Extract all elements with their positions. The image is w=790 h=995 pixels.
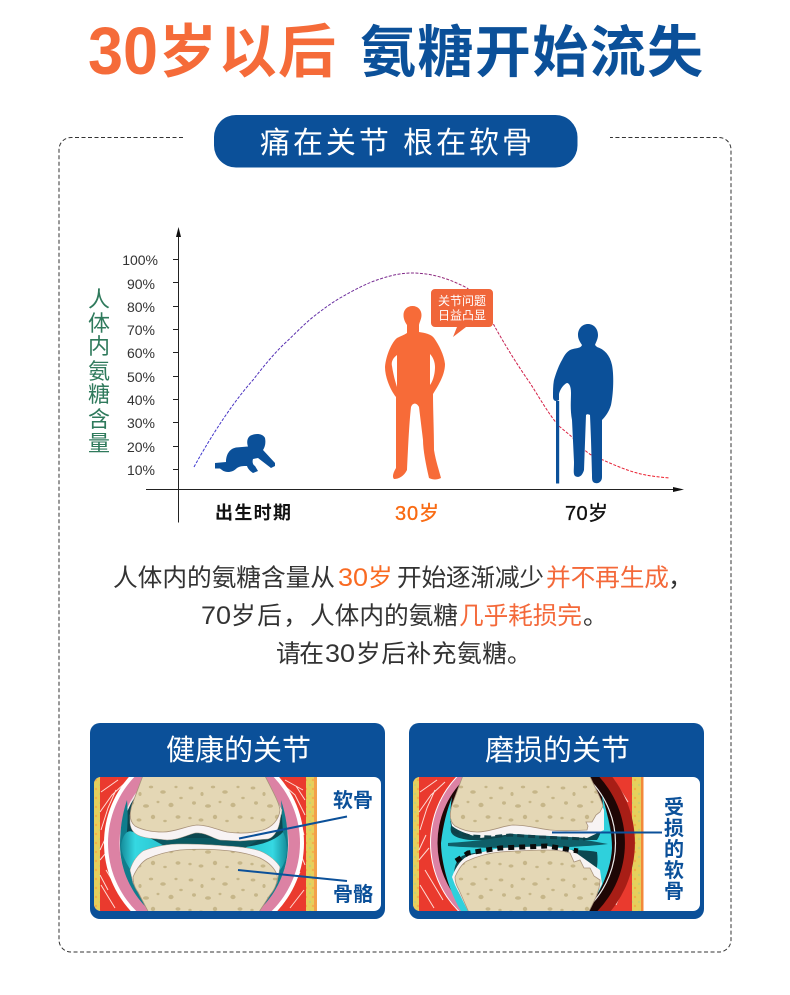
y axis title: 人 xyxy=(88,287,110,312)
paragraph line 1: ， xyxy=(668,565,693,592)
upper bone xyxy=(450,807,604,838)
paragraph line 3: 请在 xyxy=(276,640,324,668)
infographic canvas xyxy=(58,22,732,952)
x axis labels: 70岁 xyxy=(565,502,608,525)
icon: elderly silhouette with cane xyxy=(553,324,613,484)
y axis tick labels: 70% xyxy=(127,322,155,338)
icon: adult silhouette xyxy=(385,306,445,480)
label: damaged cartilage: 骨 xyxy=(664,881,684,903)
paragraph line 1 xyxy=(113,564,693,592)
y axis tick labels: 100% xyxy=(122,252,158,268)
explanatory paragraph xyxy=(113,564,693,668)
y axis title xyxy=(88,287,110,456)
y axis title: 氨 xyxy=(88,359,110,384)
lower bone xyxy=(130,844,280,906)
y axis tick labels: 60% xyxy=(127,345,155,361)
y axis title: 体 xyxy=(88,311,110,336)
panel: worn joint xyxy=(409,723,704,919)
paragraph line 1: 岁 xyxy=(368,564,393,592)
title blue part: 氨糖开始流失 xyxy=(360,21,703,84)
paragraph line 3: 岁后补充氨糖 xyxy=(356,640,507,668)
paragraph line 3: 。 xyxy=(507,641,532,668)
heading pill: 痛在关节 根在软骨 xyxy=(260,127,532,160)
y axis tick labels: 20% xyxy=(127,439,155,455)
paragraph line 1: 30 xyxy=(338,565,368,592)
adult arm gaps xyxy=(392,354,435,387)
paragraph line 3: 30 xyxy=(325,641,355,668)
paragraph line 1: 开始逐渐减少 xyxy=(397,564,544,592)
x axis labels: 出生时期 xyxy=(215,503,291,523)
paragraph line 2: 70 xyxy=(201,603,231,630)
panel heading: 健康的关节 xyxy=(166,734,311,767)
label line: damaged cartilage xyxy=(552,832,662,834)
label: damaged cartilage: 损 xyxy=(664,817,684,840)
axes with arrows xyxy=(146,227,684,522)
label: damaged cartilage: 受 xyxy=(664,796,684,819)
label: bone: 骨骼 xyxy=(333,883,373,906)
y axis tick labels: 50% xyxy=(127,369,155,385)
y axis tick labels: 10% xyxy=(127,462,155,478)
y axis tick labels: 40% xyxy=(127,392,155,408)
joint illustration xyxy=(94,777,317,911)
paragraph line 2: 几乎耗损完 xyxy=(459,602,582,630)
title orange part xyxy=(88,14,336,89)
paragraph line 3 xyxy=(276,640,532,668)
x axis labels xyxy=(215,502,608,525)
lower bone xyxy=(452,846,602,915)
paragraph line 2: 人体内的氨糖 xyxy=(310,602,458,630)
y axis tick labels: 30% xyxy=(127,415,155,431)
upper bone xyxy=(130,800,282,842)
y axis title: 量 xyxy=(88,431,110,456)
label: damaged cartilage: 的 xyxy=(664,838,684,861)
y axis tick labels: 90% xyxy=(127,276,155,292)
label: damaged cartilage: 软 xyxy=(664,859,684,882)
label line: bone xyxy=(238,870,347,881)
callout: joint problems emerge xyxy=(431,289,493,337)
y axis title: 含 xyxy=(88,407,110,432)
panel heading: 磨损的关节 xyxy=(485,734,630,767)
y axis tick labels xyxy=(122,252,158,478)
paragraph line 1: 并不再生成 xyxy=(546,564,669,592)
y axis tick labels: 80% xyxy=(127,299,155,315)
y axis title: 内 xyxy=(88,334,110,359)
icon: crawling baby xyxy=(215,434,275,473)
title xyxy=(88,14,703,89)
title orange part: 岁以后 xyxy=(159,20,336,85)
paragraph line 1: 人体内的氨糖含量从 xyxy=(113,564,335,592)
right-side darkened tissue xyxy=(598,777,635,911)
label: cartilage: 软骨 xyxy=(333,789,373,812)
callout: joint problems emerge: 关节问题 xyxy=(438,294,486,308)
title orange part: 30 xyxy=(88,14,158,89)
paragraph line 2: 岁后， xyxy=(231,602,308,630)
label line: cartilage xyxy=(239,816,347,838)
paragraph line 2 xyxy=(201,602,608,630)
label: damaged cartilage xyxy=(664,796,684,903)
panel: healthy joint xyxy=(90,723,385,919)
heading pill xyxy=(214,115,578,168)
dashed content frame xyxy=(59,138,731,952)
y axis title: 糖 xyxy=(88,382,110,407)
worn joint illustration xyxy=(413,777,644,911)
callout: joint problems emerge: 日益凸显 xyxy=(438,308,486,322)
x axis labels: 30岁 xyxy=(395,502,439,525)
paragraph line 2: 。 xyxy=(583,603,608,630)
line chart: glucosamine content by age xyxy=(88,227,684,525)
glucosamine curve xyxy=(194,273,670,478)
